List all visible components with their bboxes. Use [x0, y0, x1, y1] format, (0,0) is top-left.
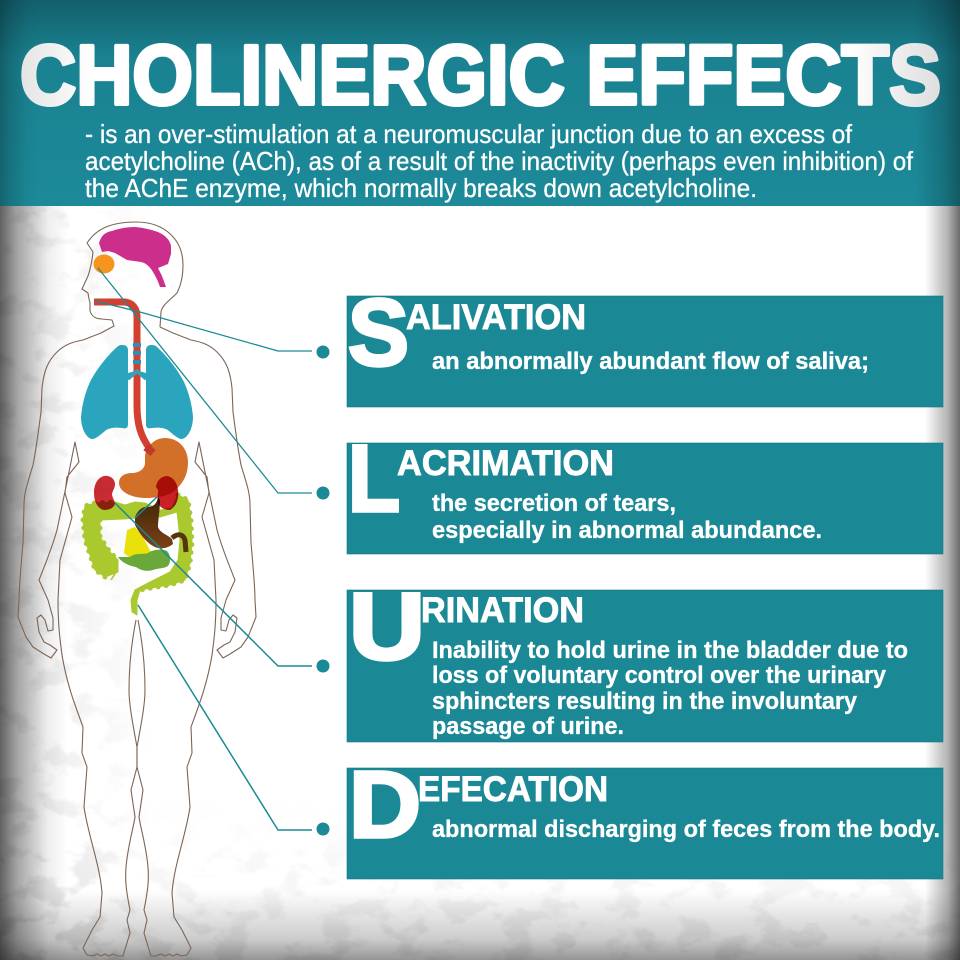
panel: lacrimation: especially in abnormal abundance. — [432, 517, 822, 544]
definition text: the AChE enzyme, which normally breaks down acetylcholine. — [85, 173, 757, 203]
connector: defecation — [138, 605, 330, 836]
colon — [83, 495, 192, 615]
definition text — [85, 119, 914, 203]
connector: urination — [115, 497, 330, 672]
kidneys — [94, 476, 178, 510]
panel: salivation: S — [348, 280, 409, 386]
panel: urination: Inability to hold urine in the bladder due to — [432, 637, 908, 664]
panel: salivation: an abnormally abundant flow of saliva; — [432, 348, 869, 375]
panel: lacrimation: the secretion of tears, — [432, 490, 676, 517]
small intestine — [124, 503, 153, 558]
panel: urination: RINATION — [421, 590, 584, 630]
header band — [0, 0, 960, 206]
sigmoid — [118, 550, 170, 571]
panel: lacrimation: L — [348, 426, 400, 532]
panel: defecation — [347, 752, 943, 879]
panel: defecation: EFECATION — [418, 769, 608, 809]
panel: lacrimation — [347, 426, 943, 554]
panel: urination: loss of voluntary control over the urinary — [432, 662, 887, 689]
background — [0, 206, 960, 960]
body outline — [18, 222, 256, 956]
esophagus — [94, 302, 153, 453]
connector: lacrimation — [98, 268, 330, 500]
panel: salivation — [347, 280, 943, 407]
panel: defecation: abnormal discharging of feces from the body. — [432, 816, 940, 843]
pituitary — [94, 254, 114, 274]
panel: defecation: D — [349, 752, 421, 858]
panel: lacrimation: ACRIMATION — [397, 443, 614, 483]
panel: urination: sphincters resulting in the involuntary — [432, 688, 858, 715]
human body diagram — [18, 222, 256, 956]
liver — [135, 497, 173, 548]
brain — [99, 227, 171, 287]
panel: urination — [347, 574, 943, 742]
connector: salivation — [95, 301, 330, 358]
lungs — [81, 345, 193, 439]
duodenum — [172, 535, 186, 552]
definition text: acetylcholine (ACh), as of a result of the inactivity (perhaps even inhibition) of — [85, 146, 914, 176]
panel: salivation: ALIVATION — [406, 297, 586, 337]
stomach — [119, 438, 188, 498]
definition text: - is an over-stimulation at a neuromuscular junction due to an excess of — [85, 119, 853, 149]
panel: urination: U — [349, 574, 425, 680]
panel: urination: passage of urine. — [432, 713, 624, 740]
